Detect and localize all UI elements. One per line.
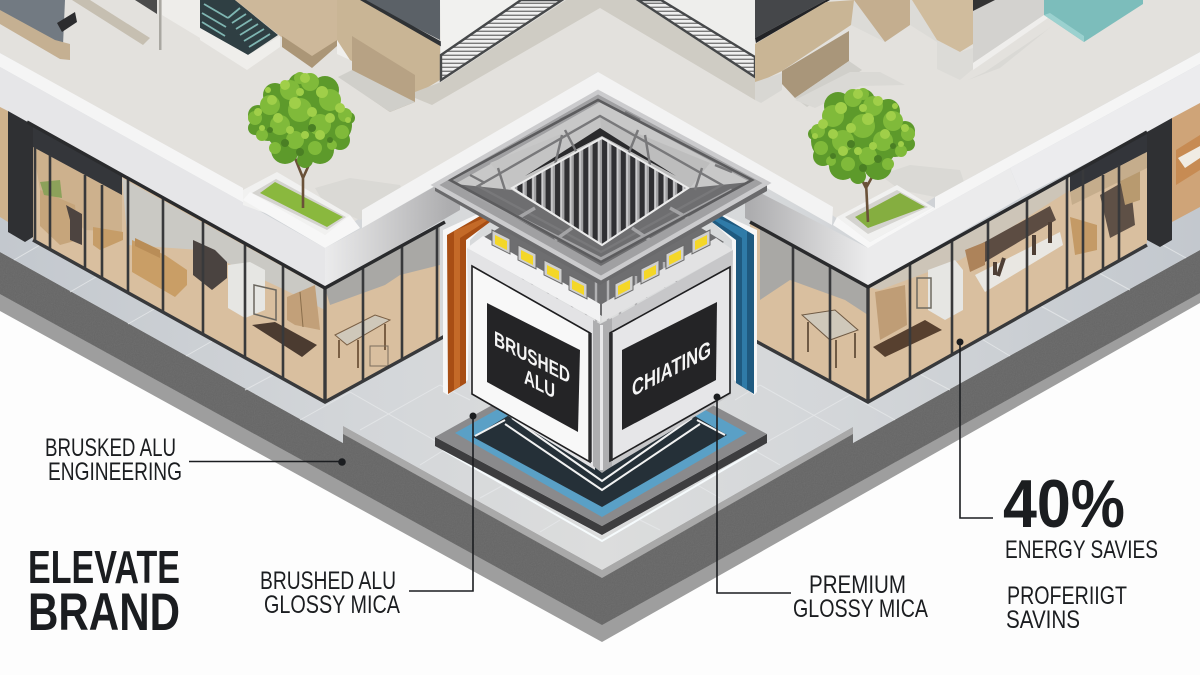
right tree (808, 88, 915, 222)
callout: brushed alu glossy mica (260, 412, 476, 619)
furniture: lounge (1070, 217, 1097, 255)
dark roof panel (755, 0, 826, 38)
callout: premium glossy mica: PREMIUM (809, 571, 906, 599)
furniture: shelf and table (40, 190, 78, 245)
callout: brusked alu engineering: ENGINEERING (48, 458, 182, 486)
ground slab: light lower edge (0, 250, 1200, 642)
louvered balustrade, left (441, 0, 562, 80)
furniture: white fridge (928, 260, 963, 320)
window interior floor (868, 132, 1147, 402)
stat caption (1006, 582, 1127, 634)
right wing parapet face (867, 168, 1022, 287)
central bar grille (512, 138, 688, 245)
left column (8, 111, 33, 242)
ground slab: dark asphalt band (0, 250, 1200, 625)
tan window beyond column (0, 107, 8, 222)
callout: premium glossy mica: GLOSSY MICA (793, 595, 928, 623)
title: BRAND (28, 583, 180, 642)
louvered balustrade, right (638, 0, 755, 77)
mullions (35, 147, 437, 402)
furniture: white fridge (228, 262, 265, 318)
truss interior (455, 102, 750, 266)
orange side fin (443, 213, 490, 395)
cube left body (467, 248, 595, 470)
illuminated base plate (435, 345, 767, 535)
stat caption: SAVINS (1006, 606, 1080, 634)
furniture: rug (975, 232, 1063, 292)
left white panel (472, 266, 590, 462)
back wall (122, 178, 325, 310)
furniture: dark cabinet (193, 240, 227, 290)
light base and tan columns (851, 0, 973, 80)
signage cube (467, 215, 733, 473)
right planter with grass (833, 185, 935, 248)
stat caption: PROFERIIGT (1007, 582, 1127, 610)
cube silver corner (593, 318, 612, 473)
background buildings, left group (0, 0, 600, 112)
right column (1147, 118, 1172, 247)
glow line around base (443, 450, 757, 541)
callout: brusked alu engineering: BRUSKED ALU (45, 434, 176, 462)
furniture: boards (287, 285, 320, 330)
upper interior, near column (33, 147, 122, 232)
LED modules (492, 230, 710, 299)
furniture: boards (875, 285, 907, 340)
mullions (793, 165, 1119, 402)
furniture: bench (252, 322, 317, 357)
frame ring (450, 100, 752, 262)
right dark sign plate with label (622, 302, 717, 430)
furniture: sofa (93, 227, 123, 250)
teal staircase (200, 0, 278, 55)
stat: 40% energy savies: ENERGY SAVIES (1005, 536, 1158, 564)
cube right body (606, 250, 733, 470)
cube top rim, right (602, 238, 733, 322)
callout: brusked alu engineering (45, 434, 346, 486)
furniture: table (802, 310, 858, 368)
title: ELEVATE (28, 541, 180, 593)
plaza shadows (315, 26, 1052, 220)
ground slab: step edge highlight (343, 426, 853, 578)
callout: brushed alu glossy mica: BRUSHED ALU (260, 567, 396, 595)
right white panel (610, 267, 730, 461)
teal pool (1044, 0, 1143, 42)
title (28, 541, 180, 642)
tan wall (337, 0, 440, 95)
tan wall (755, 0, 854, 84)
callout: brushed alu glossy mica: GLOSSY MICA (264, 591, 400, 619)
furniture: dining table (965, 206, 1056, 276)
background buildings, right group (600, 0, 1143, 107)
left storefront glazing (0, 107, 445, 402)
callout: premium glossy mica (714, 394, 928, 623)
furniture: table (335, 315, 390, 368)
left wing parapet face (0, 67, 325, 288)
back wall (760, 228, 868, 315)
frame sills (750, 245, 1147, 402)
left planter with grass (243, 172, 360, 248)
left grey block (0, 0, 65, 45)
outer rim (435, 92, 767, 278)
dark beam (27, 122, 122, 195)
left dark sign plate with label (487, 303, 580, 432)
rooftop plaza (0, 0, 1200, 240)
stat: 40% energy savies (1003, 466, 1158, 564)
left dark sign plate with label: ALU (524, 364, 555, 404)
frame sills (33, 240, 445, 402)
roof truss frame (435, 92, 767, 285)
left tree (248, 72, 355, 208)
right dark sign plate with label: CHIATING (632, 336, 711, 403)
window interior floor (27, 122, 325, 402)
blue side fin (710, 213, 757, 395)
cube LED bay (476, 215, 724, 316)
stat: 40% energy savies: 40% (1003, 466, 1125, 542)
cube top rim, left (467, 236, 600, 322)
left inner parapet face (325, 172, 460, 288)
rim and parapet (0, 52, 1200, 288)
right storefront glazing (750, 103, 1200, 402)
callout: 40% energy savings leader (956, 338, 993, 518)
tan tower (235, 0, 337, 58)
furniture: bench (873, 320, 942, 357)
dark beam (1070, 132, 1147, 192)
left wing white rim strip (0, 53, 325, 248)
left dark sign plate with label: BRUSHED (494, 326, 570, 388)
